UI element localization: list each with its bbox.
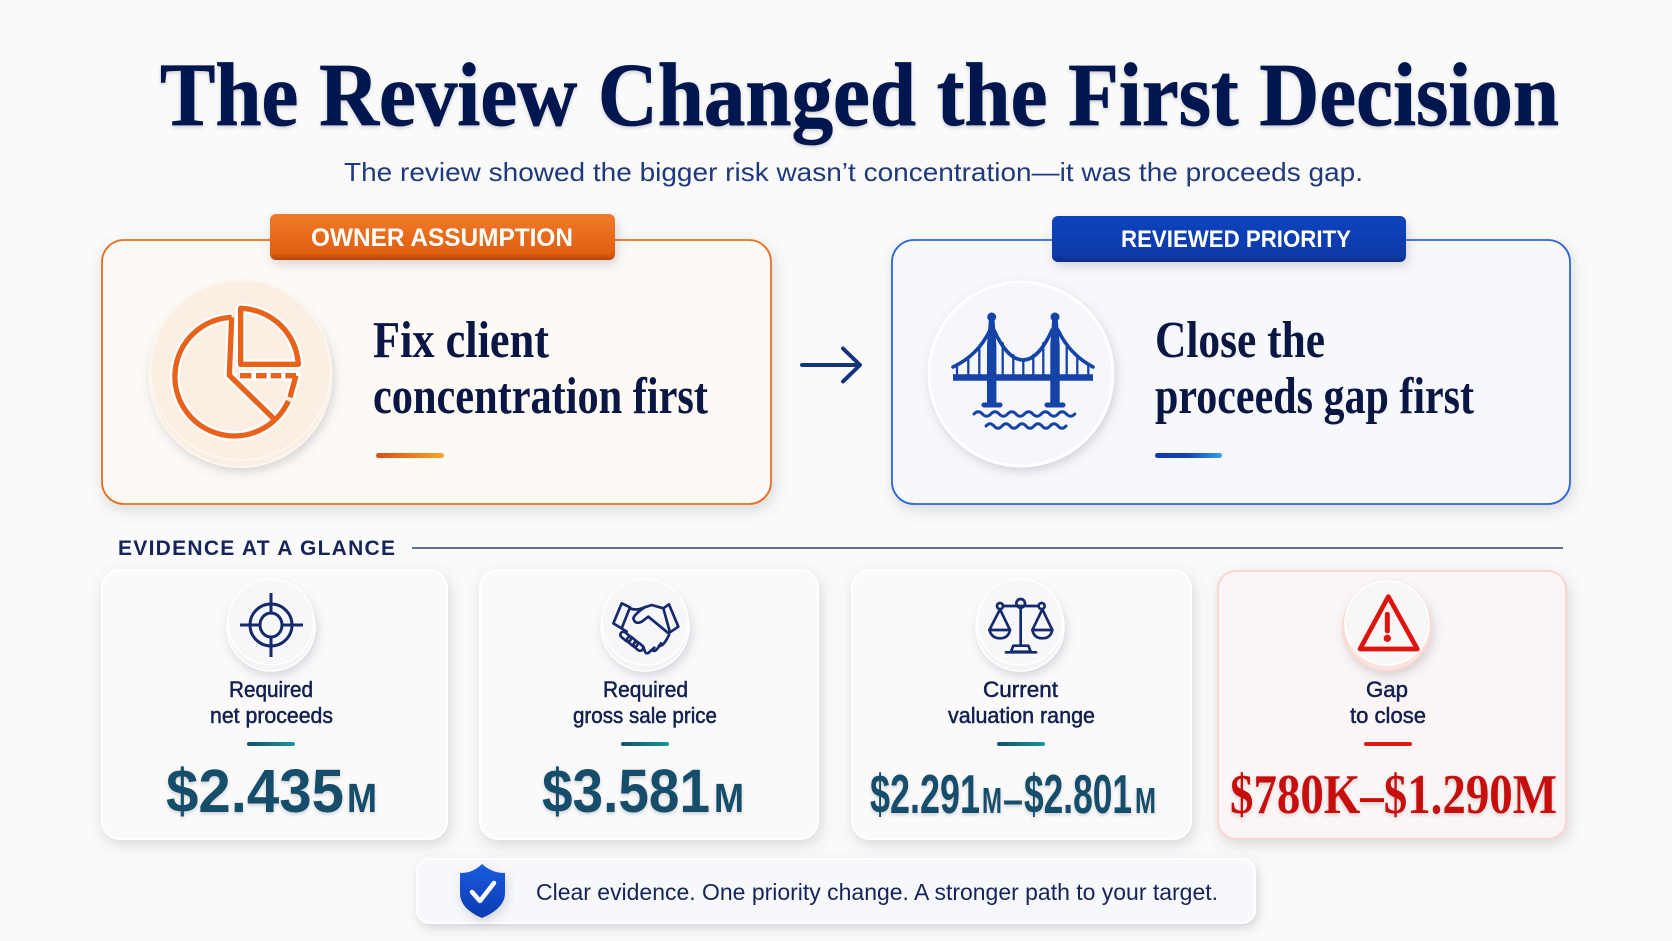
label	[210, 677, 333, 728]
accent bar	[247, 742, 295, 746]
label: valuation range	[948, 703, 1095, 728]
card background	[102, 570, 447, 839]
panel: owner assumption	[102, 214, 771, 504]
badge: owner assumption: OWNER ASSUMPTION	[311, 224, 573, 252]
arrow	[802, 348, 860, 382]
callout text: Clear evidence. One priority change. A stronger path to your target.	[536, 879, 1218, 905]
card: required net proceeds	[102, 570, 447, 839]
value: M	[347, 775, 377, 821]
heading: close the gap: proceeds gap first	[1155, 368, 1475, 425]
value: M	[714, 775, 744, 821]
callout background	[417, 859, 1255, 923]
heading: fix client: Fix client	[373, 312, 550, 369]
heading: fix client	[373, 312, 709, 425]
panel: reviewed priority	[892, 216, 1570, 504]
card background	[480, 570, 818, 839]
value: M	[1135, 780, 1156, 821]
accent bar	[376, 453, 444, 458]
badge: reviewed priority	[1052, 216, 1406, 262]
value: M	[982, 780, 1002, 821]
badge: reviewed priority: REVIEWED PRIORITY	[1121, 226, 1351, 253]
label	[573, 677, 717, 728]
card background	[1218, 571, 1566, 839]
panel card	[892, 240, 1570, 504]
icon: scales	[976, 579, 1064, 671]
subtitle: The review showed the bigger risk wasn’t concentration—it was the proceeds gap.	[344, 157, 1363, 187]
heading: close the gap	[1155, 312, 1475, 425]
label	[1350, 677, 1426, 728]
icon: target	[227, 579, 315, 671]
icon: shield check	[460, 864, 505, 918]
callout: closing statement	[417, 859, 1255, 923]
label: Gap	[1366, 677, 1408, 702]
value: –	[1003, 778, 1023, 822]
title: The Review Changed the First Decision	[160, 46, 1559, 145]
card background	[852, 570, 1191, 839]
panel card	[102, 240, 771, 504]
value	[870, 763, 1156, 825]
icon: handshake	[601, 579, 689, 671]
label	[948, 677, 1095, 728]
value: $2.801	[1024, 763, 1132, 825]
label: Required	[603, 677, 688, 702]
card: current valuation range	[852, 570, 1191, 839]
label: to close	[1350, 703, 1426, 728]
icon: pie chart	[150, 280, 332, 467]
accent bar	[997, 742, 1045, 746]
icon: bridge	[929, 282, 1113, 466]
heading: fix client: concentration first	[373, 368, 709, 425]
value: $2.291	[870, 763, 980, 825]
value: $3.581	[542, 757, 710, 825]
icon: warning	[1343, 581, 1431, 671]
label: gross sale price	[573, 703, 717, 728]
card: required gross sale price	[480, 570, 818, 839]
value: $2.435	[166, 757, 344, 825]
accent bar	[621, 742, 669, 746]
label: net proceeds	[210, 703, 333, 728]
section heading: evidence at a glance: EVIDENCE AT A GLANCE	[118, 537, 395, 560]
heading: close the gap: Close the	[1155, 312, 1325, 369]
badge: owner assumption	[270, 214, 615, 260]
card: gap to close	[1218, 571, 1566, 839]
label: Current	[983, 677, 1058, 702]
value: $780K–$1.290M	[1230, 764, 1557, 826]
label: Required	[229, 677, 313, 702]
accent bar	[1364, 742, 1412, 746]
accent bar	[1155, 453, 1222, 458]
